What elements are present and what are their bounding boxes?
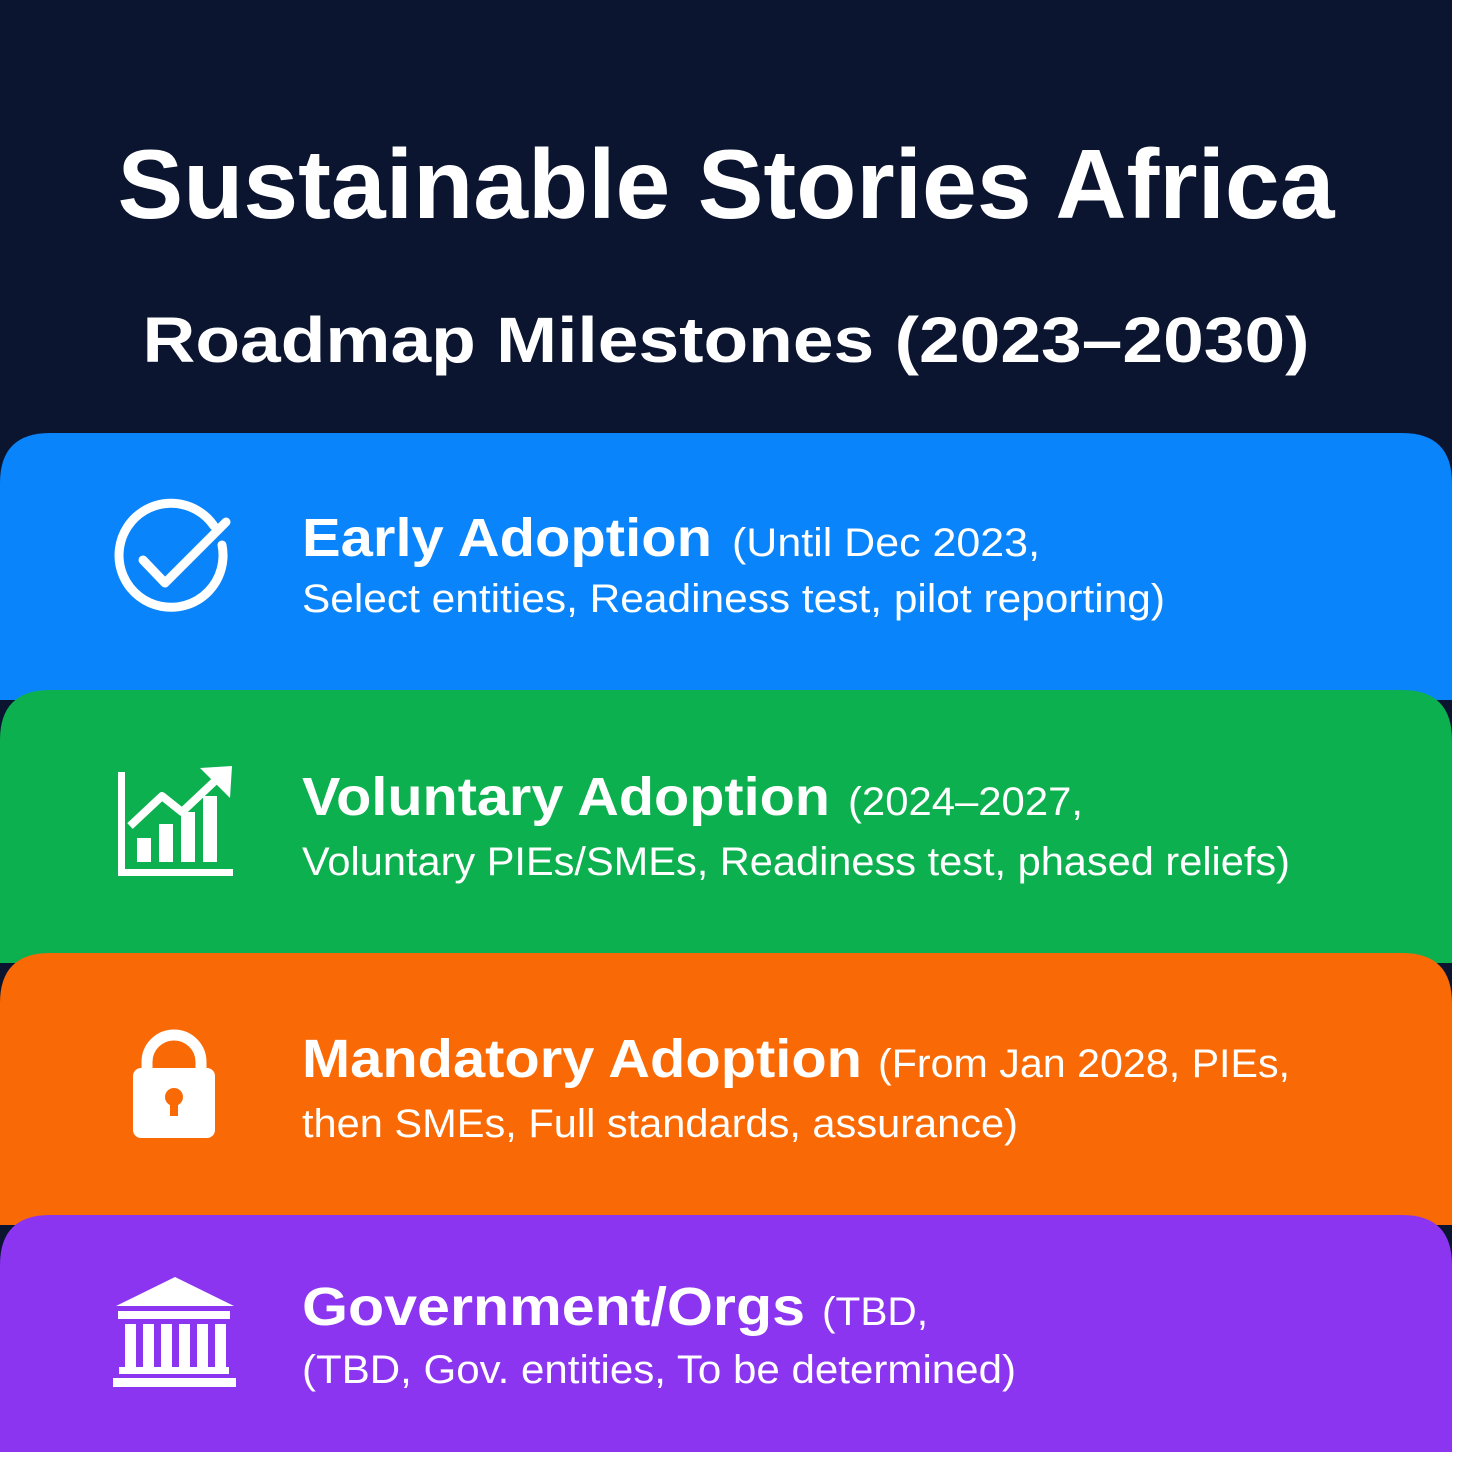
icon: lock [133,1035,215,1138]
heading: voluntary adoption: (2024–2027, [848,780,1083,824]
heading: mandatory adoption: then SMEs, Full standards, assurance) [302,1102,1018,1146]
panel: mandatory adoption [0,953,1452,1225]
heading: government/orgs: (TBD, Gov. entities, To be determined) [302,1348,1016,1392]
subtitle: Roadmap Milestones (2023–2030) [142,304,1310,376]
heading: early adoption: Select entities, Readiness test, pilot reporting) [302,577,1165,621]
heading: mandatory adoption: Mandatory Adoption [302,1029,862,1089]
heading: mandatory adoption [302,1029,1290,1146]
title: Sustainable Stories Africa [118,129,1336,239]
icon: growth chart [118,766,233,876]
heading: government/orgs: Government/Orgs [302,1277,805,1337]
heading: early adoption [302,508,1165,621]
heading: government/orgs [302,1277,1016,1392]
heading: early adoption: Early Adoption [302,508,712,568]
heading: voluntary adoption: Voluntary PIEs/SMEs, Readiness test, phased reliefs) [302,840,1290,884]
heading: mandatory adoption: (From Jan 2028, PIEs, [878,1042,1290,1086]
heading: government/orgs: (TBD, [822,1290,928,1334]
panel: government/orgs [0,1215,1452,1452]
panel: voluntary adoption [0,690,1452,963]
icon: check circle [119,503,226,607]
panel: early adoption [0,433,1452,700]
heading: voluntary adoption [302,767,1290,884]
heading: early adoption: (Until Dec 2023, [732,521,1040,565]
icon: government building [113,1277,236,1387]
heading: voluntary adoption: Voluntary Adoption [302,767,830,827]
